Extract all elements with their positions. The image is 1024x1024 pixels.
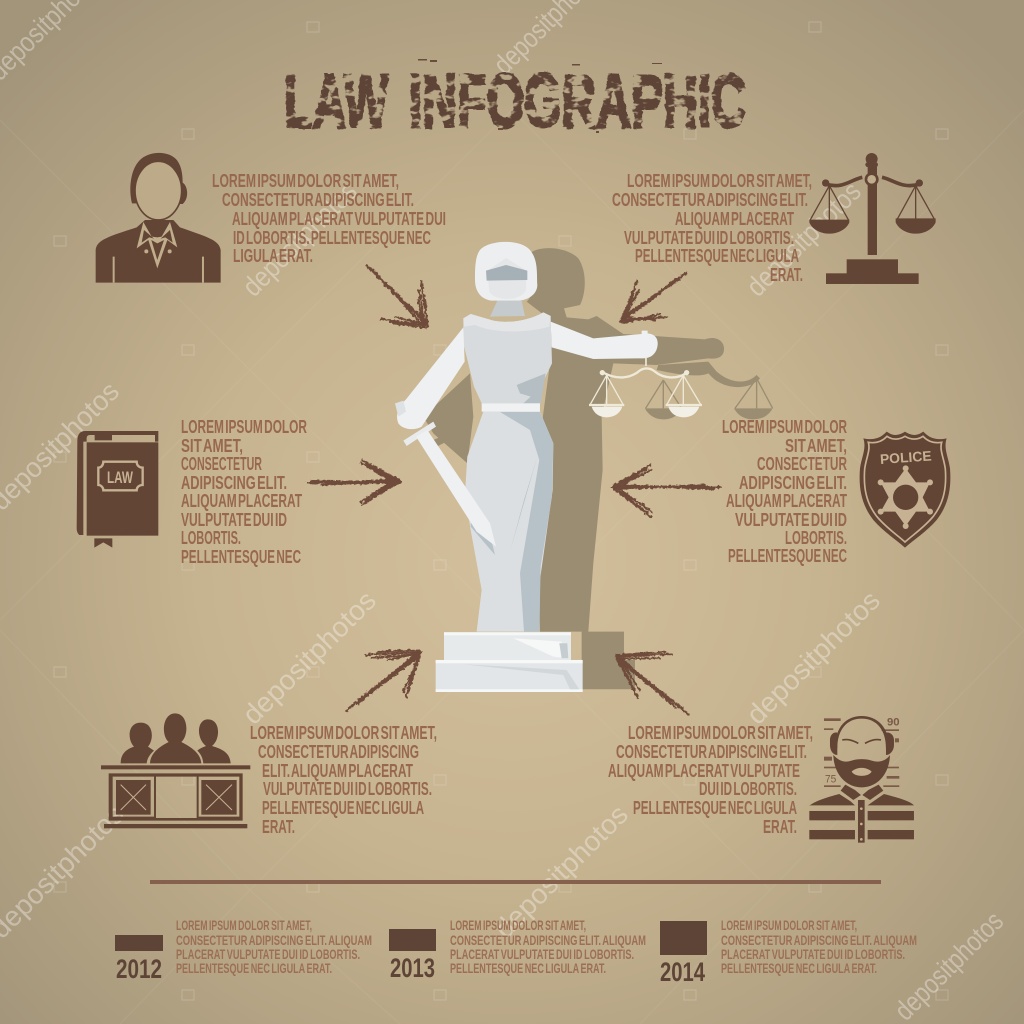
- text: scales: PELLENTESQUE NEC LIGULA: [635, 246, 799, 266]
- icon: police badge: POLICE: [879, 447, 932, 467]
- text: law book: PELLENTESQUE NEC: [181, 547, 301, 567]
- text: police badge: LOBORTIS.: [785, 528, 847, 548]
- timeline: 2013: 2013: [390, 953, 435, 983]
- text: lawyer: [212, 171, 446, 266]
- text: jury: PELLENTESQUE NEC LIGULA: [262, 798, 424, 818]
- text: prisoner: PELLENTESQUE NEC LIGULA: [633, 798, 797, 818]
- timeline: 2014: CONSECTETUR ADIPISCING ELIT. ALIQUAM: [721, 932, 917, 948]
- timeline: 2014: 2014: [660, 957, 705, 987]
- text: lawyer: ID LOBORTIS. PELLENTESQUE NEC: [233, 228, 431, 248]
- timeline: 2013: CONSECTETUR ADIPISCING ELIT. ALIQUAM: [450, 932, 646, 948]
- timeline: 2013: [389, 917, 646, 983]
- text: police badge: ALIQUAM PLACERAT: [726, 491, 847, 511]
- icon: prisoner: 90: [887, 716, 900, 728]
- arrow: top left: [367, 266, 428, 328]
- icon: lawyer: [96, 153, 221, 283]
- arrow: bottom right: [616, 652, 688, 714]
- timeline: 2014: PELLENTESQUE NEC LIGULA ERAT.: [721, 960, 877, 976]
- icon: scales: [809, 153, 936, 284]
- title: LAW: [284, 59, 388, 143]
- timeline: 2012: LOREM IPSUM DOLOR SIT AMET,: [176, 917, 312, 933]
- text: prisoner: LOREM IPSUM DOLOR SIT AMET,: [628, 723, 813, 743]
- statue shadow: [423, 248, 773, 689]
- text: police badge: VULPUTATE DUI ID: [735, 510, 847, 530]
- text: prisoner: CONSECTETUR ADIPISCING ELIT.: [616, 742, 807, 762]
- icon: law book: LAW: [107, 468, 133, 487]
- icon: prisoner: [809, 716, 914, 843]
- arrow: bottom left: [346, 650, 421, 711]
- timeline: 2013: PELLENTESQUE NEC LIGULA ERAT.: [450, 960, 606, 976]
- text: lawyer: ALIQUAM PLACERAT VULPUTATE DUI: [232, 209, 446, 229]
- timeline: 2014: [660, 917, 917, 987]
- text: police badge: ADIPISCING ELIT.: [739, 473, 847, 493]
- watermarks: depositphotos: [740, 176, 867, 302]
- text: law book: ALIQUAM PLACERAT: [181, 491, 302, 511]
- timeline: 2012: 2012: [116, 954, 162, 984]
- pedestal: [444, 632, 571, 660]
- timeline: 2013: LOREM IPSUM DOLOR SIT AMET,: [450, 917, 586, 933]
- arrow: middle left: [307, 460, 401, 505]
- text: scales: VULPUTATE DUI ID LOBORTIS.: [624, 228, 794, 248]
- text: police badge: [722, 417, 847, 566]
- watermarks: depositphotos: [236, 585, 382, 730]
- text: prisoner: ERAT.: [763, 817, 797, 837]
- text: lawyer: LIGULA ERAT.: [233, 246, 313, 266]
- text: police badge: PELLENTESQUE NEC: [728, 546, 847, 566]
- text: law book: [181, 417, 307, 567]
- text: jury: VULPUTATE DUI ID LOBORTIS.: [263, 779, 432, 799]
- watermarks: depositphotos: [488, 799, 634, 944]
- icon: police badge: [860, 432, 950, 548]
- timeline: 2014: LOREM IPSUM DOLOR SIT AMET,: [721, 917, 857, 933]
- statue scales: [589, 357, 702, 405]
- text: prisoner: DUI ID LOBORTIS.: [699, 779, 797, 799]
- text: jury: CONSECTETUR ADIPISCING: [258, 742, 419, 762]
- title: INFOGRAPHIC: [409, 59, 746, 143]
- text: police badge: SIT AMET,: [785, 436, 847, 456]
- timeline: 2012: [115, 917, 372, 984]
- arrow: top right: [620, 273, 686, 323]
- icon: law book: [77, 431, 158, 548]
- text: police badge: CONSECTETUR: [757, 454, 847, 474]
- text: law book: VULPUTATE DUI ID: [181, 510, 287, 530]
- statue with shadow: [395, 242, 773, 692]
- text: scales: CONSECTETUR ADIPISCING ELIT.: [612, 190, 808, 210]
- text: scales: [612, 171, 812, 285]
- watermarks: depositphotos: [236, 176, 363, 302]
- text: jury: [250, 723, 437, 837]
- text: police badge: LOREM IPSUM DOLOR: [722, 417, 847, 437]
- text: scales: LOREM IPSUM DOLOR SIT AMET,: [627, 171, 812, 191]
- watermarks: depositphotos: [740, 585, 886, 730]
- text: law book: CONSECTETUR: [181, 454, 262, 474]
- text: prisoner: ALIQUAM PLACERAT VULPUTATE: [608, 761, 800, 781]
- timeline: 2012: PLACERAT VULPUTATE DUI ID LOBORTIS.: [176, 946, 360, 962]
- text: lawyer: LOREM IPSUM DOLOR SIT AMET,: [212, 171, 399, 191]
- title: [284, 59, 746, 143]
- text: law book: LOBORTIS.: [181, 528, 241, 548]
- timeline: 2013: PLACERAT VULPUTATE DUI ID LOBORTIS.: [450, 946, 634, 962]
- timeline: 2014: PLACERAT VULPUTATE DUI ID LOBORTIS.: [721, 946, 905, 962]
- text: jury: ELIT. ALIQUAM PLACERAT: [262, 761, 413, 781]
- text: jury: ERAT.: [262, 817, 295, 837]
- timeline: 2012: PELLENTESQUE NEC LIGULA ERAT.: [176, 960, 332, 976]
- text: prisoner: [608, 723, 813, 837]
- text: scales: ALIQUAM PLACERAT: [675, 209, 794, 229]
- text: lawyer: CONSECTETUR ADIPISCING ELIT.: [222, 190, 414, 210]
- divider: [150, 880, 881, 884]
- text: law book: SIT AMET,: [181, 436, 243, 456]
- text: law book: ADIPISCING ELIT.: [181, 473, 287, 493]
- text: scales: ERAT.: [770, 265, 803, 285]
- statue figure: [395, 242, 702, 692]
- timeline: 2012: CONSECTETUR ADIPISCING ELIT. ALIQUAM: [176, 932, 372, 948]
- icon: prisoner: 75: [825, 773, 836, 785]
- text: law book: LOREM IPSUM DOLOR: [181, 417, 307, 437]
- icon: jury: [101, 713, 250, 828]
- watermarks: depositphotos: [488, 392, 615, 518]
- text: jury: LOREM IPSUM DOLOR SIT AMET,: [250, 723, 437, 743]
- arrow: middle right: [612, 465, 721, 517]
